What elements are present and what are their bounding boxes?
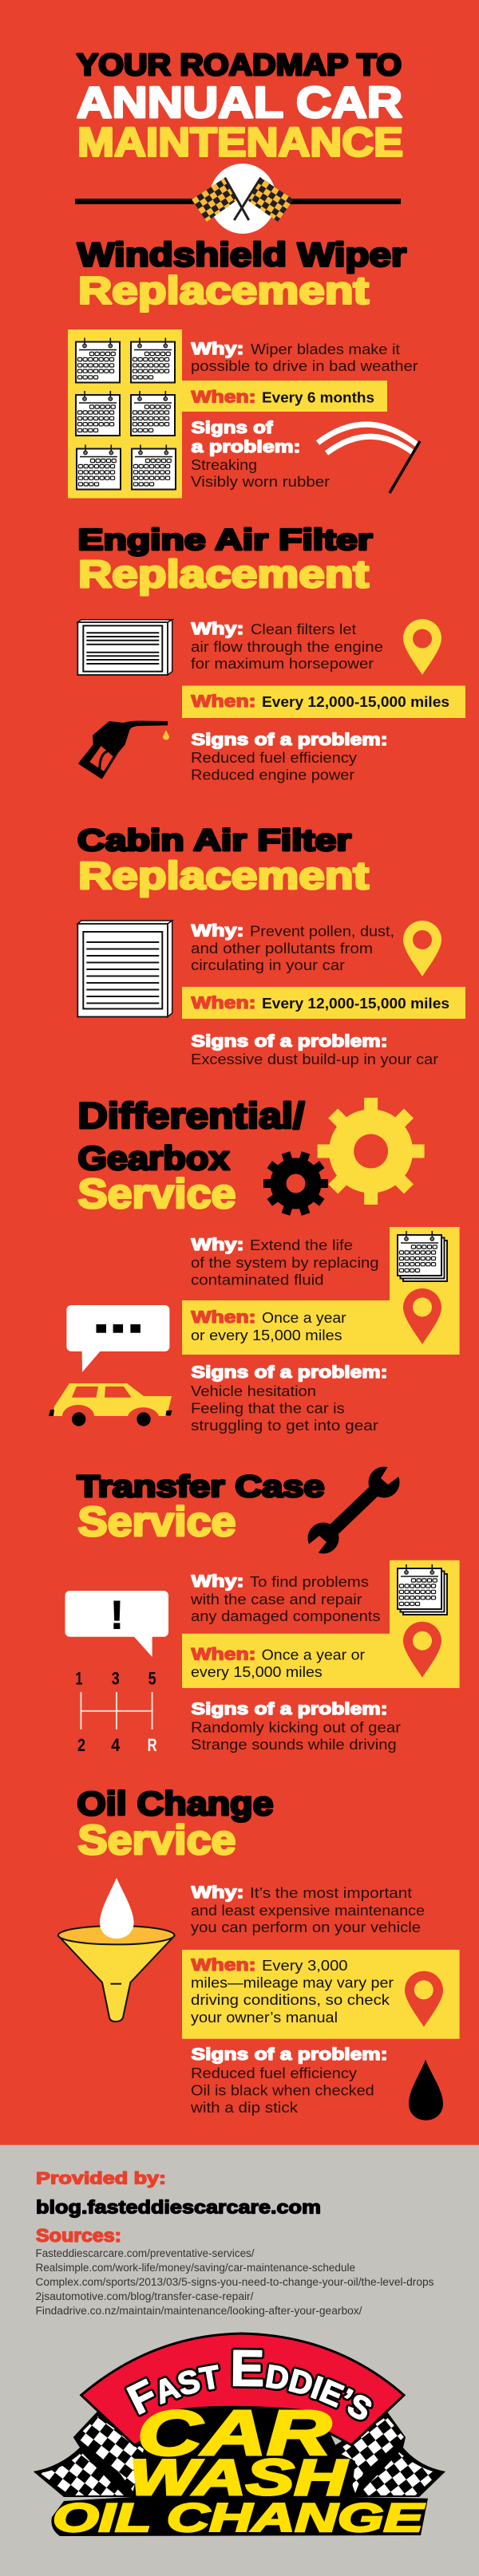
right checkered flags	[335, 2412, 445, 2497]
text: transfer signs: Strange sounds while driving	[191, 1737, 397, 1753]
text: oil why: It’s the most important	[250, 1885, 412, 1901]
icon: funnel with oil drop	[58, 1878, 174, 2022]
pin hole cabin	[413, 930, 432, 949]
text: transfer signs	[191, 1700, 401, 1753]
text: sources: 2jsautomotive.com/blog/transfer-case-repair/	[35, 2290, 254, 2302]
section 2 heading: engine air filter replacement: Engine Air Filter	[78, 523, 372, 556]
pin hole	[413, 629, 432, 648]
text: wiper when: Every 6 months	[262, 389, 374, 405]
text: engine why: Why:	[192, 620, 244, 638]
text: differential why: Extend the life	[250, 1237, 353, 1253]
text: differential signs: Vehicle hesitation	[191, 1383, 316, 1399]
text: cabin signs: Excessive dust build-up in your car	[191, 1051, 438, 1067]
text: cabin why: circulating in your car	[191, 957, 345, 973]
text: transfer why: To find problems	[250, 1574, 369, 1590]
text: engine why: for maximum horsepower	[191, 656, 374, 672]
main title: MAINTENANCE	[77, 120, 403, 164]
text: sources: Sources:	[36, 2225, 121, 2246]
text: sources: Fasteddiescarcare.com/preventative-services/	[35, 2247, 255, 2259]
section 4 heading: differential gearbox service: Gearbox	[78, 1139, 230, 1177]
icon: black oil drop	[409, 2060, 443, 2120]
text: cabin why: and other pollutants from	[191, 941, 373, 957]
text: wiper signs: Visibly worn rubber	[191, 474, 330, 490]
text: engine signs	[191, 731, 388, 783]
section 1 heading: windshield wiper replacement	[77, 236, 406, 313]
section 1 heading: windshield wiper replacement: Replacement	[78, 270, 369, 313]
section 1 heading: windshield wiper replacement: Windshield Wiper	[77, 236, 406, 273]
main title	[77, 49, 403, 164]
icon: gear shift diagram: 5	[148, 1669, 156, 1689]
icon: red pin differential	[403, 1288, 441, 1344]
text: oil signs: Signs of a problem:	[192, 2045, 388, 2064]
icon: cabin air filter	[77, 921, 172, 1016]
text: provided by: blog.fasteddiescarcare.com	[36, 2197, 321, 2218]
text: oil when	[191, 1956, 394, 2026]
text: wiper signs: a problem:	[192, 438, 300, 456]
text: differential signs	[191, 1363, 388, 1434]
panel: oil when	[182, 1950, 460, 2039]
main title: ANNUAL CAR	[77, 77, 402, 127]
icon: yellow gear	[318, 1098, 425, 1205]
panel: footer	[0, 2145, 479, 2576]
text: differential signs: struggling to get into gear	[191, 1418, 378, 1434]
CAR WASH OIL CHANGE wordmark: CAR	[137, 2397, 331, 2468]
text: engine signs: Reduced engine power	[191, 767, 354, 783]
text: engine signs: Reduced fuel efficiency	[191, 750, 357, 766]
text: transfer signs: Signs of a problem:	[192, 1700, 388, 1718]
text: differential when: When:	[192, 1308, 255, 1327]
text: transfer why: any damaged components	[191, 1608, 380, 1624]
icon: speech bubble with exclamation: !	[110, 1593, 124, 1638]
section 6 heading: oil change service: Oil Change	[77, 1785, 273, 1822]
when bar: cabin: Every 12,000-15,000 miles	[262, 996, 449, 1012]
icon: fuel nozzle	[78, 721, 169, 779]
text: sources: Realsimple.com/work-life/money/saving/car-maintenance-schedule	[35, 2262, 355, 2274]
icon: wiper blade	[318, 424, 420, 493]
text: cabin why: Why:	[192, 922, 244, 940]
when bar: cabin	[182, 987, 465, 1019]
text: differential why: Why:	[192, 1236, 244, 1254]
when bar: wipers	[182, 381, 387, 412]
section 3 heading: cabin air filter replacement: Cabin Air Filter	[77, 824, 351, 858]
text: differential when: Once a year	[262, 1310, 346, 1326]
section 2 heading: engine air filter replacement	[78, 523, 372, 596]
text: provided by: Provided by:	[36, 2170, 166, 2187]
text: sources	[35, 2225, 434, 2317]
logo: Fast Eddie's Car Wash Oil Change	[34, 2333, 445, 2540]
text: oil signs: with a dip stick	[190, 2100, 299, 2116]
icon: yellow car	[49, 1383, 172, 1426]
text: wiper signs: Signs of	[192, 419, 274, 437]
text: cabin why: Prevent pollen, dust,	[250, 924, 394, 940]
section 5 heading: transfer case service	[77, 1470, 324, 1545]
text: wiper why: Wiper blades make it	[251, 341, 400, 357]
text: wiper why: Why:	[192, 340, 244, 358]
section 4 heading: differential gearbox service: Differential/	[78, 1095, 305, 1136]
icon: red pin transfer	[403, 1622, 441, 1678]
icon: speech bubble with dots	[66, 1305, 169, 1372]
text: differential why	[191, 1236, 378, 1288]
when bar: engine	[182, 686, 465, 718]
text: oil signs: Reduced fuel efficiency	[191, 2065, 357, 2081]
text: engine why	[191, 620, 383, 672]
text: cabin signs: Signs of a problem:	[192, 1032, 388, 1051]
icon: speech bubble with exclamation	[65, 1591, 168, 1657]
section 6 heading: oil change service: Service	[78, 1817, 236, 1864]
icon: location pin cabin	[403, 921, 441, 976]
text: transfer when	[191, 1646, 365, 1680]
text: oil when: When:	[192, 1956, 255, 1974]
text: provided by	[36, 2170, 321, 2218]
divider with checkered flags	[75, 164, 401, 234]
text: transfer why: with the case and repair	[190, 1592, 362, 1608]
text: oil when: driving conditions, so check	[191, 1992, 390, 2008]
icon: gear shift diagram: R	[148, 1735, 157, 1755]
text: sources: Findadrive.co.nz/maintain/maintenance/looking-after-your-gearbox/	[35, 2305, 362, 2317]
icon: engine air filter	[77, 620, 172, 675]
text: transfer when: When:	[192, 1646, 255, 1664]
text: wiper when: When:	[192, 388, 255, 407]
red arch banner	[81, 2333, 404, 2445]
text: transfer when: every 15,000 miles	[191, 1664, 323, 1680]
text: oil signs	[190, 2045, 388, 2116]
section 4 heading: differential gearbox service: Service	[78, 1171, 236, 1217]
icon: gear shift diagram	[75, 1669, 157, 1755]
text: engine why: Clean filters let	[251, 621, 356, 637]
text: oil signs: Oil is black when checked	[191, 2083, 374, 2099]
section 3 heading: cabin air filter replacement	[77, 824, 369, 897]
banner wordmark: FAST EDDIE’S	[126, 2350, 372, 2420]
text: oil why	[191, 1884, 425, 1935]
icon: gear shift diagram: 3	[112, 1669, 120, 1689]
icon: calendar stack differential	[398, 1231, 447, 1281]
section 5 heading: transfer case service: Service	[78, 1499, 236, 1545]
panel: calendars six months	[68, 329, 182, 498]
text: wiper signs	[191, 419, 330, 490]
CAR WASH OIL CHANGE wordmark: WASH	[129, 2450, 348, 2506]
when bar: engine: When:	[192, 692, 255, 711]
icon: black gear	[263, 1151, 328, 1216]
text: cabin why	[191, 922, 394, 973]
text: cabin signs	[191, 1032, 438, 1067]
text: wiper why: possible to drive in bad weather	[191, 358, 418, 374]
panel: transfer yellow block	[182, 1560, 460, 1688]
text: transfer signs: Randomly kicking out of gear	[191, 1720, 401, 1736]
icon: location pin	[403, 619, 441, 675]
text: oil why: you can perform on your vehicle	[191, 1919, 421, 1935]
panel: differential yellow block	[182, 1227, 460, 1355]
text: differential signs: Signs of a problem:	[192, 1363, 388, 1382]
text: transfer why: Why:	[192, 1572, 244, 1591]
section 6 heading: oil change service	[77, 1785, 273, 1864]
text: sources: Complex.com/sports/2013/03/5-signs-you-need-to-change-your-oil/the-level-drops	[35, 2276, 434, 2288]
section 3 heading: cabin air filter replacement: Replacement	[78, 855, 369, 897]
CAR WASH OIL CHANGE wordmark: OIL CHANGE	[53, 2495, 425, 2540]
text: oil why: and least expensive maintenance	[191, 1903, 425, 1919]
text: differential when: or every 15,000 miles	[191, 1327, 342, 1343]
text: engine signs: Signs of a problem:	[192, 731, 388, 749]
when bar: cabin: When:	[192, 994, 255, 1012]
text: differential why: contaminated fluid	[191, 1272, 324, 1288]
text: transfer why	[190, 1572, 380, 1624]
banner wordmark: FAST EDDIE’S	[125, 2347, 374, 2422]
icon: wrench	[303, 1460, 404, 1559]
icon: calendar stack transfer	[398, 1564, 447, 1615]
icon: gear shift diagram: 2	[77, 1735, 85, 1755]
section 4 heading: differential gearbox service	[78, 1095, 305, 1217]
left checkered flags	[34, 2412, 148, 2497]
section 2 heading: engine air filter replacement: Replacement	[78, 554, 369, 596]
main title: YOUR ROADMAP TO	[77, 49, 402, 82]
section 5 heading: transfer case service: Transfer Case	[77, 1470, 324, 1504]
text: wiper signs: Streaking	[191, 457, 257, 473]
text: differential why: of the system by replacing	[191, 1255, 378, 1271]
icon: gear shift diagram: 1	[75, 1669, 83, 1689]
text: wiper when	[192, 388, 374, 407]
icon: gear shift diagram: 4	[111, 1735, 121, 1755]
when bar: engine: Every 12,000-15,000 miles	[262, 694, 449, 710]
text: oil why: Why:	[192, 1884, 244, 1902]
icon: red pin oil	[405, 1971, 443, 2027]
black lettering backing	[51, 2406, 428, 2536]
text: wiper why	[191, 340, 418, 374]
text: transfer when: Once a year or	[262, 1647, 365, 1663]
CAR WASH OIL CHANGE wordmark	[53, 2397, 425, 2540]
text: oil when: Every 3,000	[262, 1958, 348, 1974]
text: differential signs: Feeling that the car is	[191, 1401, 345, 1417]
text: oil when: your owner’s manual	[191, 2010, 338, 2026]
text: oil when: miles—mileage may vary per	[191, 1975, 394, 1991]
text: differential when	[191, 1308, 346, 1343]
text: engine why: air flow through the engine	[191, 639, 383, 655]
